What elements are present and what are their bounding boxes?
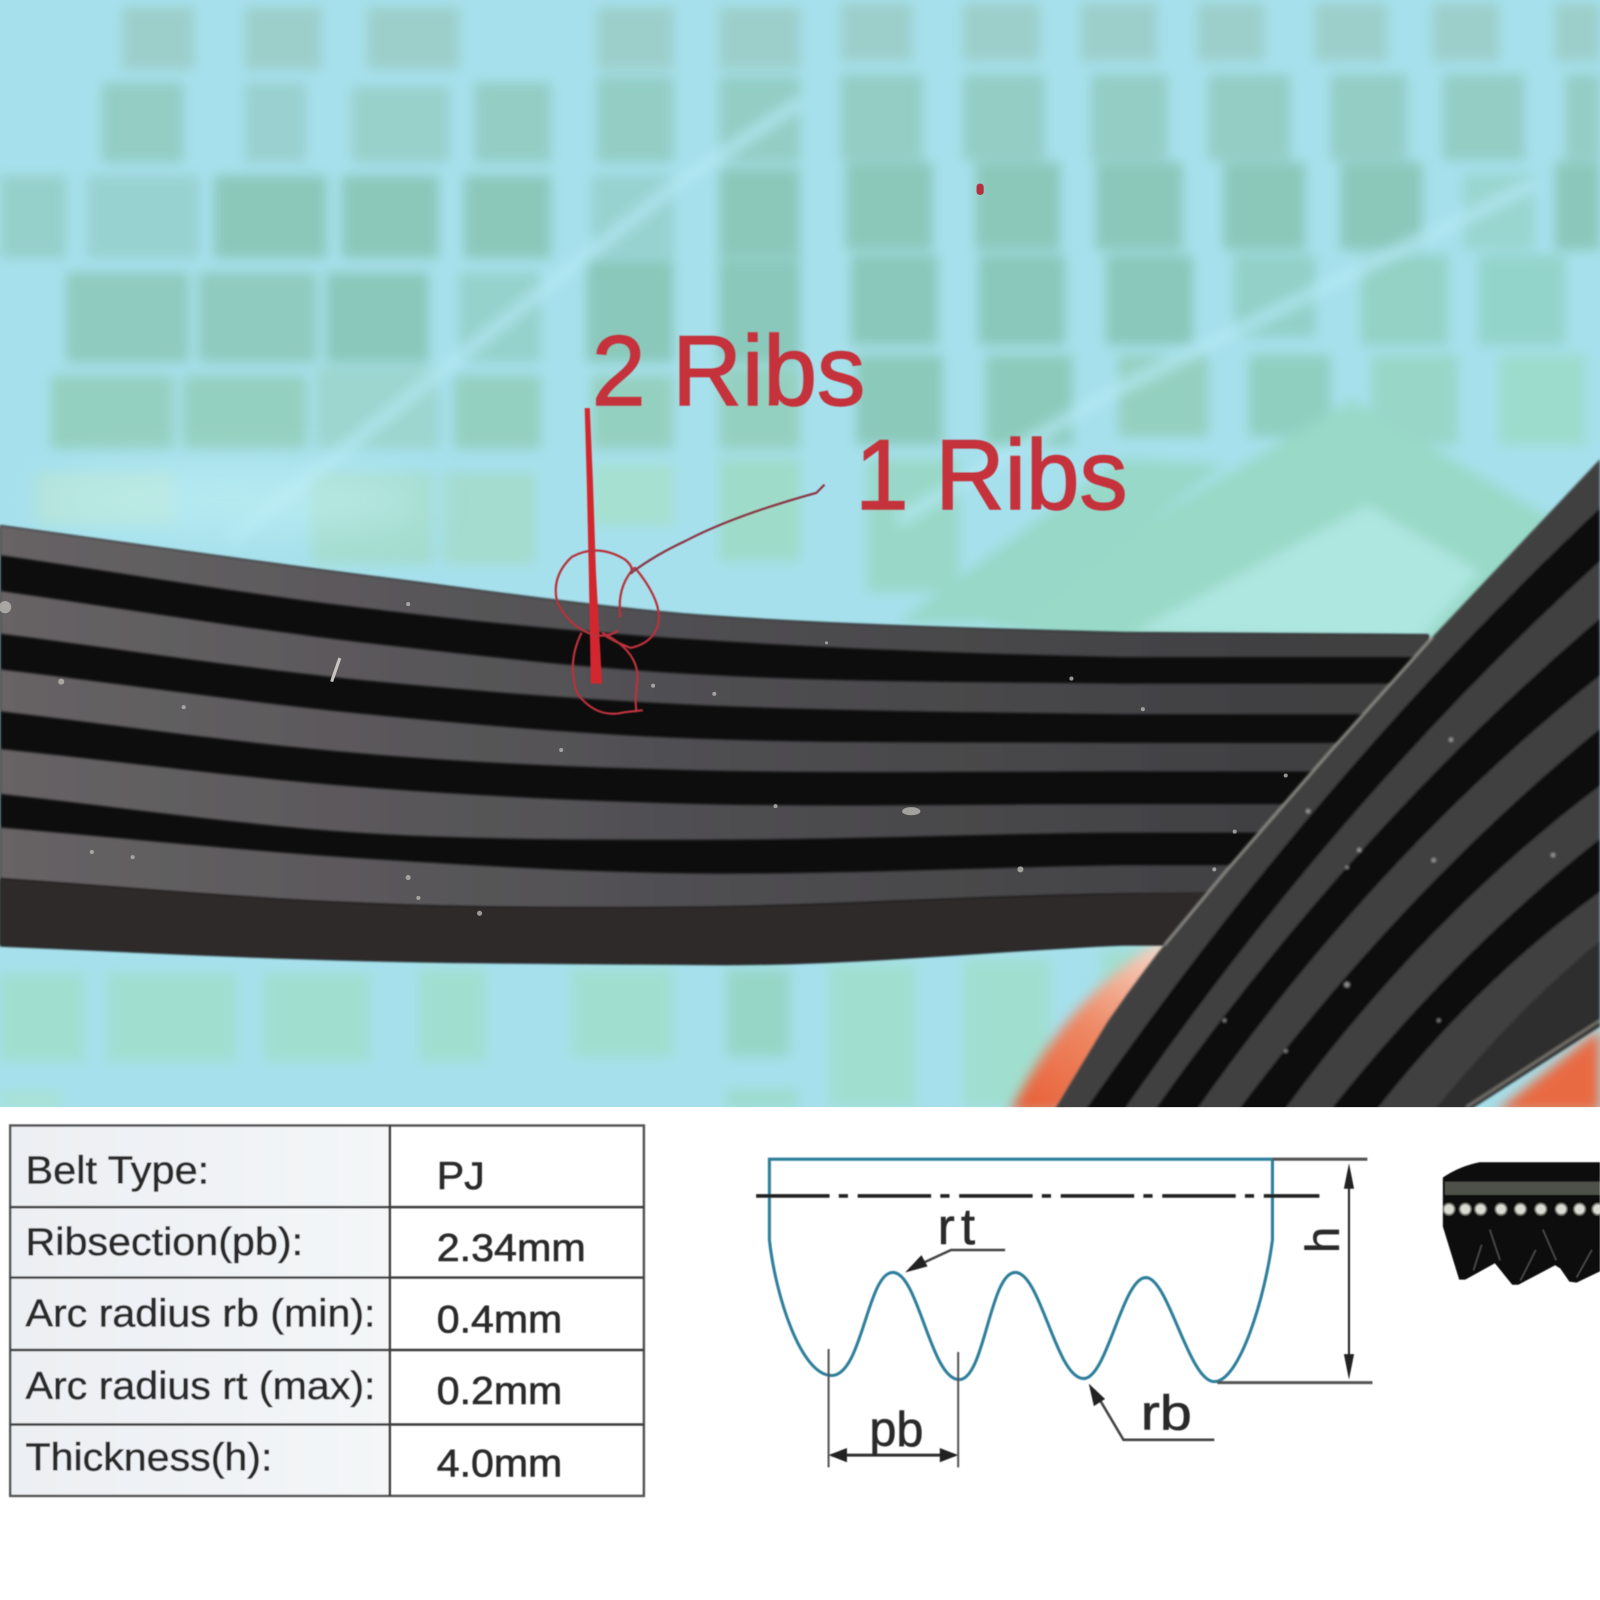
dimension pb: [829, 1349, 958, 1467]
row: ribsection: [26, 1221, 586, 1270]
lower strip cells: [0, 949, 1163, 1107]
row: thickness: 4.0mm: [437, 1443, 562, 1486]
row: thickness: [26, 1436, 562, 1486]
row: arc radius rt: 0.2mm: [437, 1370, 562, 1413]
pale glare: [41, 471, 429, 529]
row: arc radius rb: [26, 1293, 562, 1342]
annotation: 2 Ribs line: [585, 408, 602, 684]
orange belt behind: [1010, 939, 1600, 1112]
row: belt type: Belt Type:: [26, 1150, 209, 1193]
label: 2 Ribs: 2 Ribs: [592, 315, 865, 426]
row: thickness: Thickness(h):: [26, 1436, 272, 1479]
cutting mat grid background: [0, 3, 1600, 1107]
callout rb: [1089, 1384, 1214, 1441]
row: arc radius rb: 0.4mm: [437, 1299, 562, 1342]
row: arc radius rt: [26, 1365, 562, 1413]
label: 1 Ribs: 1 Ribs: [855, 419, 1128, 530]
diagonal belt: [1053, 459, 1600, 1112]
horizontal belt: [0, 526, 1429, 964]
icon: belt cross-section photo: [1443, 1162, 1600, 1285]
row: belt type: [26, 1150, 485, 1198]
row: arc radius rt: Arc radius rt (max):: [26, 1365, 376, 1408]
dimension h: h: [1297, 1227, 1349, 1253]
rubber speckles: [0, 601, 1288, 916]
panel: belt photograph: [0, 0, 1600, 1112]
pale chevron: [996, 398, 1548, 638]
panel: specification table: [10, 1126, 644, 1496]
callout rb: rb: [1141, 1387, 1192, 1441]
callout rt: [905, 1198, 1005, 1272]
profile outline: [769, 1159, 1272, 1382]
dimension pb: pb: [869, 1403, 923, 1457]
annotation: 1 Ribs leader: [631, 485, 824, 573]
diagonal light scores: [230, 102, 1535, 541]
row: arc radius rb: Arc radius rb (min):: [26, 1293, 376, 1336]
chart: belt cross-section diagram: [756, 1159, 1372, 1467]
highlight along edge: [1164, 637, 1433, 945]
row: ribsection: Ribsection(pb):: [26, 1221, 303, 1264]
annotation: hand-drawn circles: [556, 550, 659, 714]
centre line: [756, 1194, 1319, 1198]
red speck: [977, 184, 984, 195]
row: belt type: PJ: [437, 1155, 485, 1198]
row: ribsection: 2.34mm: [437, 1227, 586, 1270]
callout rt: rt: [938, 1198, 981, 1255]
dimension h: [1217, 1159, 1372, 1383]
